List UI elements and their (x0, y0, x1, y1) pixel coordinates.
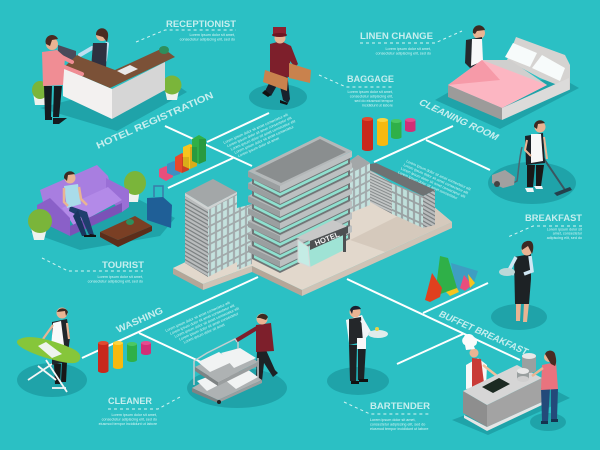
caption block: Lorem ipsum dolor sit amet consectetur elit (169, 304, 235, 336)
tower left (185, 179, 252, 277)
caption: consectetur adipiscing elit, sed do (376, 52, 431, 56)
caption: incididunt ut labore (362, 104, 393, 108)
heading: BREAKFAST (525, 213, 582, 224)
panel: baggage (249, 27, 394, 110)
caption block: Lorem ipsum dolor sit amet (183, 323, 225, 344)
dashed leader (136, 30, 236, 42)
main tower (248, 136, 352, 273)
caption: consectetur adipiscing elit, sed do (370, 422, 425, 426)
caption: consectetur adipiscing elit, (350, 94, 393, 98)
caption: Lorem ipsum dolor sit amet, (370, 418, 416, 422)
heading: BARTENDER (370, 401, 430, 412)
maid (465, 25, 485, 68)
wing right (345, 155, 435, 228)
caption block: Lorem ipsum dolor sit amet consectetur elit (174, 306, 240, 339)
caption (376, 47, 431, 56)
caption: Lorem ipsum dolor sit amet, (386, 47, 431, 51)
counter (463, 365, 542, 431)
panel: linen change (360, 25, 579, 129)
receptionist woman (80, 28, 108, 69)
dashed leader (319, 75, 394, 87)
cleaning maid (525, 120, 547, 192)
upper towels (198, 352, 232, 372)
rotated heading: HOTEL REGISTRATION (95, 90, 215, 152)
entrance (296, 220, 348, 267)
caption: Lorem ipsum dolor sit (547, 228, 582, 232)
floor shadow (17, 363, 87, 397)
sofa (37, 165, 129, 236)
caption (348, 90, 394, 108)
caption: Lorem ipsum dolor sit amet, (348, 90, 393, 94)
caption: eiusmod tempor incididunt ut labore (99, 422, 157, 426)
ironing person (43, 308, 70, 384)
floor shadow (249, 84, 307, 110)
panel: cleaner (99, 314, 287, 426)
caption block: Lorem ipsum dolor sit amet consectetur elit (223, 113, 289, 145)
caption: Lorem ipsum dolor sit amet, (112, 413, 157, 417)
caption: consectetur adipiscing elit, sed do (102, 418, 157, 422)
heading: LINEN CHANGE (360, 31, 433, 42)
panel: cleaning room (362, 98, 576, 204)
dashed leader (360, 31, 462, 43)
counter shadow (452, 385, 570, 435)
hotel sign: HOTEL (313, 230, 341, 248)
caption: consectetur adipiscing elit, sed do (88, 280, 143, 284)
desk (63, 46, 175, 119)
caption: eiusmod tempor incididunt ut labore (370, 427, 428, 431)
waitress (499, 241, 533, 322)
cylinder chart (362, 117, 416, 151)
caption: Lorem ipsum dolor sit amet, (98, 275, 143, 279)
upper shelf (195, 348, 258, 382)
plant right (124, 171, 146, 202)
monitor (58, 45, 76, 62)
caption block: Lorem ipsum dolor sit amet consectetur elit (403, 163, 469, 195)
plant left (28, 209, 52, 240)
caption block (397, 158, 471, 204)
dashed leader (108, 397, 180, 409)
suitcase (147, 186, 172, 228)
suitcases (263, 70, 288, 91)
panel: buffet counter (452, 334, 570, 435)
floor shadow (491, 304, 547, 330)
laundry cart (192, 339, 262, 404)
block bar chart (159, 135, 206, 181)
rotated heading: WASHING (115, 305, 165, 336)
panel: tourist (28, 165, 175, 284)
tourist woman (64, 171, 96, 237)
cart frame (194, 339, 258, 398)
caption: sed do eiusmod tempor (354, 99, 394, 103)
panel: bartender (327, 306, 430, 431)
caption (370, 418, 428, 431)
coffee table (100, 216, 152, 247)
caption (88, 275, 143, 284)
customer woman (532, 351, 558, 424)
caption block: Lorem ipsum dolor sit amet consectetur elit (406, 159, 471, 192)
floor shadow (30, 190, 175, 250)
caption block (223, 111, 300, 161)
panel: hotel building (173, 136, 452, 296)
plates (517, 353, 536, 382)
dashed leader (508, 226, 582, 237)
rotated heading: CLEANING ROOM (416, 98, 501, 143)
caption block: Lorem ipsum dolor sit amet consectetur (397, 170, 459, 201)
caption block: Lorem ipsum dolor sit amet (237, 136, 280, 158)
vacuum cleaner (492, 147, 572, 196)
caption block: Lorem ipsum dolor sit amet consectetur (178, 311, 240, 342)
rotated heading: BUFFET BREAKFAST (436, 309, 530, 358)
panel: breakfast (425, 213, 583, 358)
guest man (42, 35, 82, 124)
bed (448, 37, 570, 120)
connector lines (82, 113, 520, 364)
bellboy (262, 27, 311, 105)
caption block: Lorem ipsum dolor sit amet consectetur elit (226, 116, 292, 148)
customer shadow (530, 413, 566, 431)
platform (173, 175, 452, 296)
ironing board (17, 337, 80, 392)
caption: Lorem ipsum dolor sit amet, (190, 33, 235, 37)
floor shadow (187, 368, 287, 408)
dashed leader (344, 402, 430, 414)
floor shadow (327, 367, 389, 395)
waiter (346, 306, 388, 384)
desk shadow (40, 80, 187, 131)
caption block: Lorem ipsum dolor sit amet consectetur elit (165, 301, 231, 333)
caption (99, 413, 157, 426)
floor shadow (488, 162, 576, 204)
caption (547, 228, 583, 240)
heading: BAGGAGE (347, 74, 394, 85)
dashed leader (42, 258, 143, 271)
chef (462, 334, 497, 389)
caption (180, 33, 235, 42)
cleaner man (237, 314, 278, 381)
plant left (32, 81, 48, 105)
triangular chart (425, 256, 478, 302)
bed shadow (435, 80, 579, 129)
heading: RECEPTIONIST (166, 19, 236, 30)
caption: consectetur adipiscing elit, sed do (180, 38, 235, 42)
caption: adipiscing elit, sed do (547, 236, 582, 240)
plant right (162, 76, 182, 100)
heading: CLEANER (108, 396, 152, 407)
caption block: Lorem ipsum dolor sit amet consectetur elit (230, 119, 296, 152)
caption: amet, consectetur (553, 232, 583, 236)
panel: washing (17, 298, 243, 397)
caption block: Lorem ipsum dolor sit amet consectetur elit (400, 167, 466, 199)
panel: hotel registration (95, 90, 300, 181)
panel: receptionist (32, 19, 236, 131)
heading: TOURIST (102, 260, 144, 271)
caption block: Lorem ipsum dolor sit amet consectetur (234, 125, 295, 155)
caption block (165, 298, 243, 349)
cylinder chart (98, 341, 151, 373)
lower shelf (192, 371, 262, 400)
lower towels (197, 371, 232, 391)
